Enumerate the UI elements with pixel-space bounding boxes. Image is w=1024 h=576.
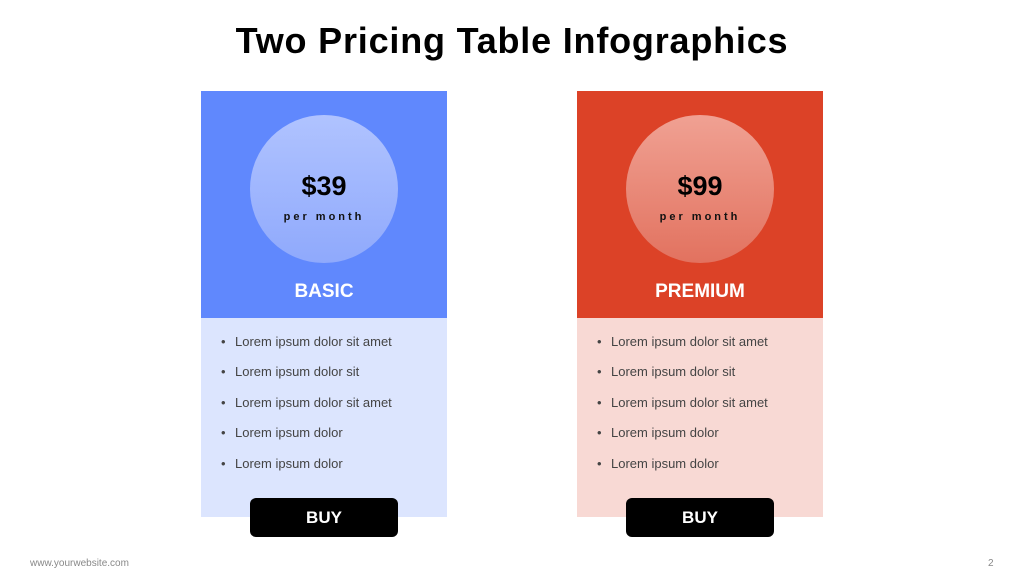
feature list: • — [221, 334, 226, 349]
buy button: BUY — [306, 508, 342, 527]
feature list: Lorem ipsum dolor — [611, 456, 719, 471]
feature list: • — [597, 334, 602, 349]
feature list: • — [597, 395, 602, 410]
price circle: $99 — [677, 171, 723, 201]
feature list: Lorem ipsum dolor sit amet — [235, 395, 392, 410]
feature list: • — [597, 456, 602, 471]
feature list: Lorem ipsum dolor sit amet — [611, 334, 768, 349]
feature list: • — [597, 364, 602, 379]
feature list — [201, 318, 447, 517]
feature list: Lorem ipsum dolor sit — [235, 364, 359, 379]
price circle: $39 — [301, 171, 347, 201]
feature list: Lorem ipsum dolor sit amet — [611, 395, 768, 410]
feature list: Lorem ipsum dolor — [611, 425, 719, 440]
plan name: PREMIUM — [655, 281, 745, 302]
feature list: Lorem ipsum dolor sit — [611, 364, 735, 379]
basic header — [201, 91, 447, 318]
panel: basic — [201, 91, 447, 537]
feature list: Lorem ipsum dolor — [235, 456, 343, 471]
feature list: • — [221, 456, 226, 471]
feature list: Lorem ipsum dolor — [235, 425, 343, 440]
feature list: • — [221, 425, 226, 440]
buy button: BUY — [682, 508, 718, 527]
title: Two Pricing Table Infographics — [236, 20, 788, 61]
page number: 2 — [988, 558, 994, 569]
price circle — [250, 115, 398, 263]
buy button — [626, 498, 774, 537]
feature list — [577, 318, 823, 517]
premium header — [577, 91, 823, 318]
panel: premium — [577, 91, 823, 537]
buy button — [250, 498, 398, 537]
feature list: • — [221, 395, 226, 410]
price circle: per month — [660, 211, 740, 223]
price circle — [626, 115, 774, 263]
feature list: Lorem ipsum dolor sit amet — [235, 334, 392, 349]
feature list: • — [597, 425, 602, 440]
feature list: • — [221, 364, 226, 379]
footer url: www.yourwebsite.com — [30, 558, 129, 569]
price circle: per month — [284, 211, 364, 223]
plan name: BASIC — [294, 281, 354, 302]
